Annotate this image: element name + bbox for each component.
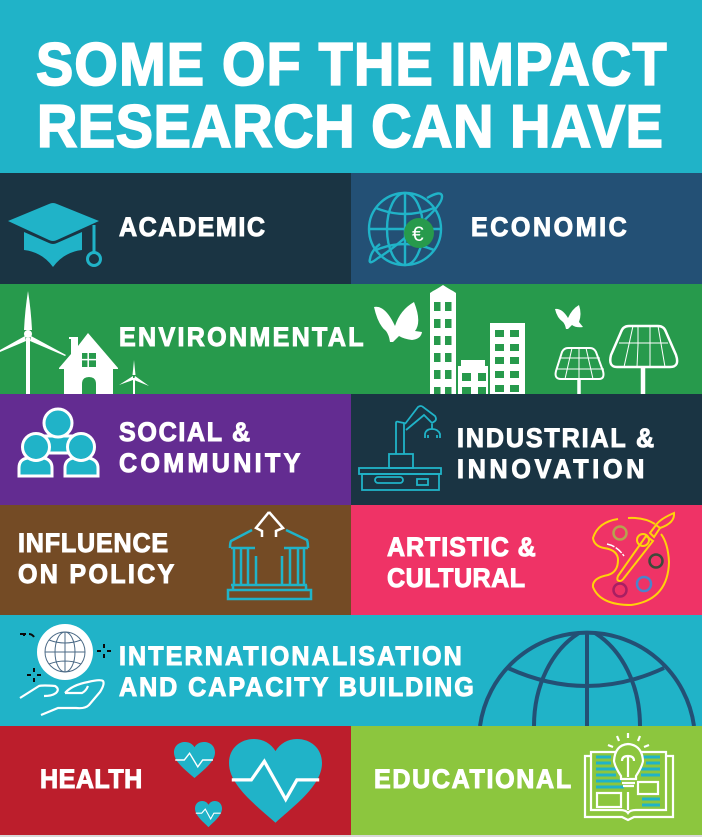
panel: influence on policy — [0, 505, 351, 615]
panel: environmental — [0, 284, 702, 394]
icon: paint palette — [593, 513, 674, 605]
panel: academic — [0, 173, 351, 284]
panel: influence on policy: ON POLICY — [18, 558, 174, 589]
icon: open book with light bulb — [585, 733, 673, 820]
icon: globe with euro — [369, 193, 442, 265]
icon: wind turbine small — [119, 360, 149, 394]
icon: solar panel small — [556, 348, 604, 394]
icon: buildings — [430, 285, 525, 394]
panel: educational — [351, 726, 702, 835]
icon: house — [59, 333, 118, 394]
panel: internationalisation and capacity building: AND CAPACITY BUILDING — [119, 671, 474, 702]
panel: economic: ECONOMIC — [471, 211, 627, 242]
title panel: SOME OF THE IMPACT — [36, 32, 667, 98]
panel: environmental: ENVIRONMENTAL — [119, 321, 364, 352]
panel: social and community — [0, 394, 351, 505]
panel: internationalisation and capacity building: INTERNATIONALISATION — [119, 640, 462, 671]
icon: community group — [19, 409, 98, 476]
panel: internationalisation and capacity building — [0, 615, 702, 726]
panel: industrial and innovation: INDUSTRIAL & — [457, 422, 654, 453]
panel: academic: ACADEMIC — [119, 211, 265, 242]
icon: government building with arrow — [228, 512, 311, 599]
icon: globe with euro: € — [412, 223, 424, 246]
panel: economic — [351, 173, 702, 284]
icon: small heart bottom — [195, 801, 222, 827]
title panel: RESEARCH CAN HAVE — [37, 94, 663, 160]
icon: small heart top — [174, 742, 215, 778]
icon: wind turbine large — [0, 291, 66, 394]
panel: influence on policy: INFLUENCE — [18, 527, 168, 558]
panel: industrial and innovation: INNOVATION — [457, 453, 644, 484]
panel: health — [0, 726, 351, 835]
icon: globe in hand — [20, 624, 111, 715]
panel: industrial and innovation — [351, 394, 702, 505]
panel: social and community: SOCIAL & — [119, 416, 250, 447]
panel: health: HEALTH — [40, 763, 142, 794]
icon: large heart — [229, 739, 322, 823]
panel: educational: EDUCATIONAL — [374, 763, 571, 794]
icon: solar panel large — [610, 326, 677, 394]
panel: social and community: COMMUNITY — [119, 447, 300, 478]
icon: large globe — [480, 632, 694, 726]
icon: butterfly small — [555, 305, 583, 329]
title panel — [0, 0, 702, 173]
panel: artistic and cultural: ARTISTIC & — [387, 531, 536, 562]
icon: graduation cap — [8, 203, 100, 267]
icon: butterfly large — [374, 302, 422, 342]
icon: robot arm — [359, 406, 441, 490]
panel: artistic and cultural: CULTURAL — [387, 562, 525, 593]
panel: artistic and cultural — [351, 505, 702, 615]
